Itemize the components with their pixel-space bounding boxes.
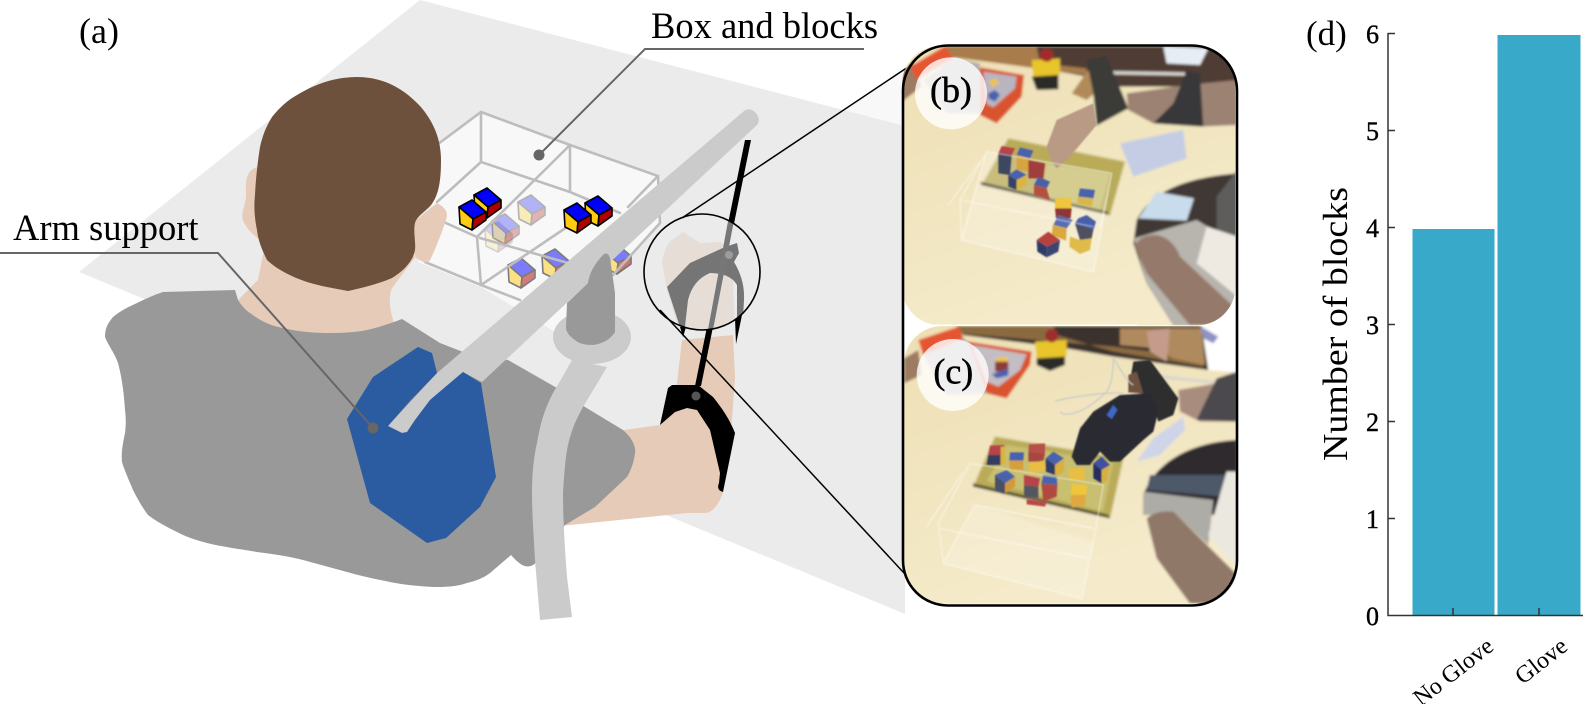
axes (1388, 33, 1583, 616)
label: (a): (a) (79, 11, 119, 51)
wrist cuff tips (680, 315, 742, 344)
rod (695, 140, 751, 386)
blue shoulder pad (347, 347, 496, 543)
callout: Arm support (0, 207, 378, 434)
label circle (c) (917, 339, 989, 411)
callout: Box and blocks: Box and blocks (651, 5, 878, 46)
clear box in photo b (948, 152, 1112, 272)
box and blocks apparatus (418, 112, 660, 335)
y tick labels: 3 (1366, 311, 1379, 340)
glove (1128, 360, 1178, 422)
clear box in photo c (927, 463, 1103, 598)
cuff (667, 243, 744, 335)
x tick labels (1409, 633, 1573, 704)
label: (d): (d) (1306, 14, 1347, 53)
photo (b) (900, 43, 1240, 330)
white divider between photos (903, 324, 1137, 326)
magnifier lens (643, 213, 761, 331)
arm support bar (388, 109, 759, 433)
black forearm strap (660, 385, 735, 492)
hand in photo b (1047, 103, 1097, 168)
y tick labels: 5 (1366, 117, 1379, 146)
rod through lens (708, 221, 734, 329)
solid cubes (459, 188, 612, 233)
y tick labels: 0 (1366, 602, 1379, 631)
blocks in photo b (998, 103, 1097, 257)
zoom lines (660, 67, 908, 573)
hair (254, 77, 441, 291)
callout: Box and blocks (534, 5, 878, 160)
table surface (79, 0, 905, 614)
y axis title: Number of blocks (1316, 187, 1355, 461)
y tick labels: 4 (1366, 214, 1379, 243)
wires (1055, 358, 1133, 414)
label circle (b) (915, 57, 987, 129)
panel: (d) bar chart (1306, 14, 1583, 704)
upper arm and elbow (560, 335, 735, 526)
support pole (532, 254, 631, 620)
label circle (b): (b) (930, 70, 972, 110)
y tick labels: 2 (1366, 408, 1379, 437)
callout: Arm support: Arm support (13, 207, 199, 248)
shirt (105, 290, 635, 587)
ears and neck (238, 167, 447, 345)
person (105, 77, 735, 587)
y tick labels: 1 (1366, 505, 1379, 534)
frame (903, 46, 1237, 606)
box outline (425, 112, 660, 300)
panel: photos (b) and (c) (900, 43, 1240, 608)
zoom cone (660, 67, 908, 572)
panel: (a) arm support illustration (79, 0, 908, 620)
bars (1412, 35, 1580, 615)
photo (c) (900, 325, 1240, 608)
faded cubes (485, 195, 631, 288)
hand (662, 232, 734, 330)
label circle (c): (c) (933, 351, 973, 391)
x tick labels: Glove (1510, 633, 1573, 690)
y tick labels (1366, 20, 1379, 631)
y tick labels: 6 (1366, 20, 1379, 49)
blocks and glove in photo c (987, 360, 1178, 508)
